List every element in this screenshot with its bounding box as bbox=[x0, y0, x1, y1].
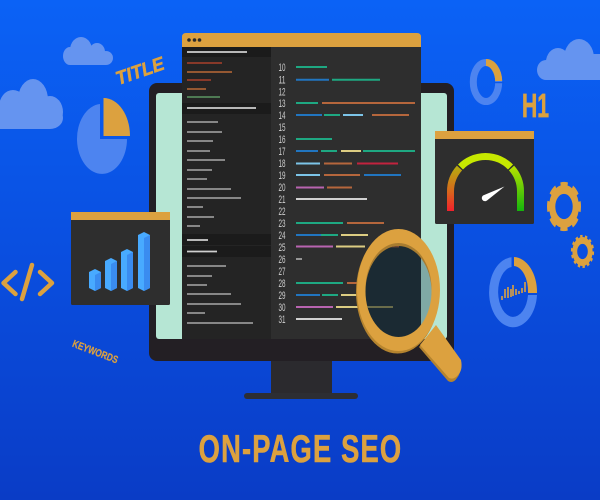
line numbers: 10 bbox=[278, 62, 286, 74]
icon: small gear bbox=[572, 236, 593, 267]
code lines bbox=[296, 67, 415, 319]
ring bbox=[356, 230, 439, 354]
monitor stand bbox=[244, 361, 358, 399]
icon: top right donut bbox=[473, 62, 504, 102]
line numbers bbox=[278, 62, 286, 326]
line numbers: 16 bbox=[278, 134, 286, 146]
main heading: ON-PAGE SEO bbox=[199, 428, 402, 471]
line numbers: 24 bbox=[278, 230, 286, 242]
line numbers: 31 bbox=[278, 314, 286, 326]
line numbers: 21 bbox=[278, 194, 286, 206]
sidebar bbox=[182, 47, 271, 339]
line numbers: 25 bbox=[278, 242, 286, 254]
line numbers: 27 bbox=[278, 266, 286, 278]
keywords label: KEYWORDS bbox=[71, 338, 120, 366]
icon: code brackets bbox=[4, 265, 52, 299]
line numbers: 30 bbox=[278, 302, 286, 314]
code window bbox=[182, 33, 421, 339]
line numbers: 12 bbox=[278, 86, 286, 98]
line numbers: 28 bbox=[278, 278, 286, 290]
icon: large cloud left bbox=[0, 79, 63, 129]
line numbers: 18 bbox=[278, 158, 286, 170]
icon: small cloud top left bbox=[63, 37, 113, 65]
window body bbox=[182, 46, 421, 339]
handle bbox=[419, 327, 461, 382]
gauge needle bbox=[482, 186, 504, 201]
line numbers: 14 bbox=[278, 110, 286, 122]
title label: TITLE bbox=[113, 53, 168, 90]
H1 label: H1 bbox=[522, 87, 549, 124]
panel: bar chart bbox=[71, 212, 170, 305]
line numbers: 29 bbox=[278, 290, 286, 302]
line numbers: 19 bbox=[278, 170, 286, 182]
chart bars bbox=[89, 232, 150, 291]
gauge arc bbox=[450, 156, 521, 211]
monitor bbox=[149, 83, 454, 361]
icon: large gear bbox=[549, 184, 579, 229]
line numbers: 11 bbox=[278, 74, 286, 86]
icon: cloud top right bbox=[537, 39, 600, 80]
magnifying glass bbox=[356, 229, 462, 382]
lens bbox=[366, 246, 432, 337]
line numbers: 23 bbox=[278, 218, 286, 230]
line numbers: 26 bbox=[278, 254, 286, 266]
line numbers: 15 bbox=[278, 122, 286, 134]
window title bar bbox=[182, 33, 421, 47]
line numbers: 13 bbox=[278, 98, 286, 110]
line numbers: 22 bbox=[278, 206, 286, 218]
icon: lower donut chart bbox=[489, 257, 537, 327]
line numbers: 20 bbox=[278, 182, 286, 194]
panel: speed gauge bbox=[435, 131, 534, 224]
line numbers: 17 bbox=[278, 146, 286, 158]
icon: pie chart bbox=[77, 98, 130, 174]
